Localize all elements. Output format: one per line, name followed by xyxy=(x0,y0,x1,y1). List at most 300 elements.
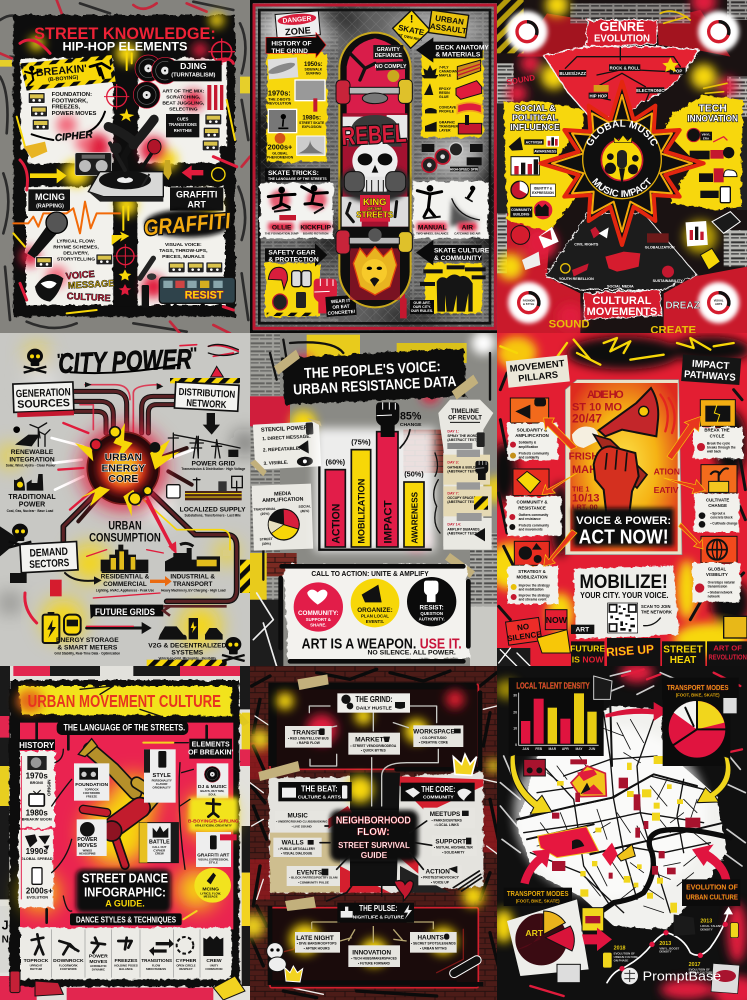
strip: dance styles: FOOTWORK xyxy=(60,967,78,971)
sign: skate at own risk: AT OWN RISK xyxy=(398,33,423,42)
column: elements of breakin xyxy=(188,739,239,903)
chart: local talent density: LOCAL TALENT DENSITY xyxy=(516,681,590,691)
panel: timeline of revolt: OF REVOLT xyxy=(448,416,482,422)
poster: megaphone and fist xyxy=(565,380,682,555)
card: support: SUPPORT xyxy=(435,838,466,845)
pathway: break the cycle: CYCLE xyxy=(710,433,724,438)
block: localized supply xyxy=(167,476,246,517)
badge: resist: RESIST: xyxy=(420,604,444,611)
chart: evolution of urban culture timeline: VINYL, BOOST xyxy=(659,946,680,950)
sub-panel: graffiti art: GRAFFITI xyxy=(176,189,217,199)
pillar: solidarity: SOLIDARITY & xyxy=(517,427,547,432)
chart: evolution of urban culture timeline: EVOLUTION OF xyxy=(686,882,738,891)
panel: deck anatomy xyxy=(416,37,489,137)
strip: dance styles: CYPHER xyxy=(176,958,197,964)
card: music: • UNDERGROUND CLUBS/BUSKING xyxy=(276,820,328,824)
panel: skate tricks: TWO-WHEEL BALANCE xyxy=(416,232,449,236)
card: market: • QUICK BYTES xyxy=(361,749,387,753)
panel: safety gear: WEAR IT xyxy=(331,298,351,304)
heading: urban consumption: URBAN xyxy=(108,519,142,533)
block: energy storage: & SMART METERS xyxy=(57,644,118,651)
pillar: strategy: MOBILIZATION xyxy=(517,575,547,580)
strip: dance styles: RHYTHM xyxy=(30,967,43,971)
sub-panel: graffiti art: ART xyxy=(187,199,206,209)
card: support xyxy=(432,835,477,856)
block: energy storage: ENERGY STORAGE xyxy=(56,637,119,644)
block: power grid: POWER GRID xyxy=(192,460,235,467)
chart: evolution of urban culture timeline xyxy=(603,879,740,994)
pathway: global visibility: GLOBAL xyxy=(708,566,726,571)
card: power moves: HEADSPINS xyxy=(79,852,96,856)
poster: megaphone and fist: FRISH xyxy=(569,452,599,463)
poster: megaphone and fist: ADIE HO xyxy=(587,389,624,401)
panel: skate culture: & COMMUNITY xyxy=(434,255,482,262)
column: elements of breakin: ATHLETICISM, CREATIVITY xyxy=(195,823,232,827)
illustration: central starburst xyxy=(538,80,706,247)
card: battle: CALL OUT xyxy=(152,845,167,849)
pathway: cultivate change: concrete block xyxy=(710,516,733,520)
sub-panel: mcing: STORYTELLING xyxy=(57,257,95,263)
icon: urban energy core xyxy=(75,423,180,516)
panel: neighborhood flow xyxy=(242,666,500,1000)
panel: mobilize xyxy=(574,566,679,639)
panel: skate tricks: BOARD ROTATION xyxy=(303,232,328,236)
block: traditional power: POWER xyxy=(19,501,45,508)
title: STREET KNOWLEDGE: xyxy=(34,24,216,43)
pillar: strategy: and mobilization xyxy=(519,587,544,591)
label: distribution network: NETWORK xyxy=(186,398,227,411)
label: distribution network xyxy=(174,382,239,412)
sign: danger zone xyxy=(275,11,320,38)
pillar: strategy: STRATEGY & xyxy=(518,569,546,574)
badge: resist xyxy=(407,577,456,626)
panel: history of the grind: THE GRIND xyxy=(271,48,308,55)
chart: visual arts donut: VISUAL xyxy=(714,299,724,303)
card: action: ACTION xyxy=(426,868,450,875)
panel: skate tricks: CATCHING BIG AIR xyxy=(454,232,480,236)
illustration: skateboard deck xyxy=(336,32,412,308)
panel: urban movement culture: JR xyxy=(2,918,18,932)
strip: dance styles: MOVES xyxy=(89,959,108,965)
panel: skate infographic xyxy=(247,0,507,334)
sub-panel: djing: DJING xyxy=(180,61,207,71)
card: walls: • PUBLIC ART/GALLERY xyxy=(278,847,316,851)
panel: skate tricks xyxy=(260,168,488,238)
panel: deck anatomy: GLUE xyxy=(439,95,449,99)
block: renewable integration: Solar, Wind, Hydro · Clean Power xyxy=(6,463,56,467)
panel: skate tricks: KICKFLIP xyxy=(300,224,332,231)
truck and wheels xyxy=(336,79,412,104)
pillar: solidarity: Protects community xyxy=(519,451,549,455)
label: impact pathways xyxy=(681,354,741,385)
pillar: community xyxy=(506,469,561,536)
watermark: promptbase: PromptBase xyxy=(643,969,721,984)
strip: dance styles: FLOORWORK xyxy=(59,963,79,967)
card: workspace: WORKSPACE xyxy=(413,729,455,736)
panel: cultural movements: CULTURAL xyxy=(593,295,652,307)
block: industrial and transport xyxy=(161,543,226,592)
pillar: solidarity: and solidarity xyxy=(519,456,539,460)
panel: voice and power: STREET xyxy=(663,644,703,655)
card: events: EVENTS xyxy=(297,869,322,876)
panel: timeline of revolt: DAY 14: xyxy=(447,523,461,527)
panel: deck anatomy: DECK ANATOMY xyxy=(435,44,489,51)
panel: timeline of revolt: (ABSTRACT TEXT) xyxy=(447,500,477,504)
chart: evolution of urban culture timeline: 2017 xyxy=(689,962,701,968)
sub-panel: djing: SCRATCHING, xyxy=(166,95,201,101)
card: foundation: FOOTWORK xyxy=(83,791,101,795)
panel: mobilize: MOBILIZE! xyxy=(579,572,668,593)
strip: dance styles: POWER xyxy=(89,954,108,960)
icon: bearings: HIGH-SPEED SPIN xyxy=(450,167,479,171)
panel: tech innovation: INNOVATION xyxy=(687,114,738,124)
sub-panel: mcing xyxy=(13,189,120,303)
panel: social and political influence: POLITICAL xyxy=(512,112,559,122)
heading: neighborhood flow: STREET SURVIVAL xyxy=(338,840,410,850)
sub-panel: graffiti art: RESIST xyxy=(185,289,224,301)
chart: local talent density: 10 xyxy=(513,727,517,731)
panel: mobilize: YOUR CITY. YOUR VOICE. xyxy=(580,590,668,600)
card: power moves: MOVES xyxy=(78,843,97,849)
card: transit: TRANSIT xyxy=(292,729,321,736)
chart: evolution of urban culture timeline: ON PHASE xyxy=(614,959,629,963)
block: industrial and transport: TRANSPORT xyxy=(173,581,212,588)
panel: genre evolution: GENRE xyxy=(599,20,645,34)
sub-panel: mcing: (RAPPING) xyxy=(36,203,64,209)
panel: cultural movements xyxy=(545,213,697,319)
badge: community: COMMUNITY: xyxy=(298,610,339,617)
arrow: red left xyxy=(182,165,203,180)
block: residential and commercial xyxy=(96,545,154,592)
panel: timeline of revolt: OCCUPY SPACE. xyxy=(447,496,475,500)
panel: global music impact xyxy=(497,0,747,333)
panel: mobilize: THE NETWORK xyxy=(641,610,672,615)
chart: media amplification pie: (30%) xyxy=(262,542,271,546)
panel: timeline of revolt: (ABSTRACT TEXT) xyxy=(447,531,477,535)
chart: transport modes lower pie: ART xyxy=(525,928,544,938)
card: foundation xyxy=(74,763,109,801)
chart: media amplification pie: TRADITIONAL xyxy=(253,507,276,512)
chart: evolution of urban culture timeline: DENSITY xyxy=(659,950,672,954)
panel: call to action xyxy=(281,565,470,661)
illustration: skateboard deck: NO COMPLY xyxy=(375,64,407,70)
sub-panel: djing: BEAT JUGGLING, xyxy=(162,101,205,107)
label: movement pillars xyxy=(506,355,570,388)
card: foundation: FOUNDATION xyxy=(75,782,108,788)
panel: timeline of revolt xyxy=(438,400,493,550)
sub-panel: graffiti art: GRAFFITI xyxy=(143,208,232,240)
sub-panel: breakin: FREEZES, xyxy=(52,105,81,111)
label: generation sources: SOURCES xyxy=(17,397,70,411)
card: battle xyxy=(139,823,179,863)
card: action xyxy=(418,865,462,885)
block: renewable integration: INTEGRATION xyxy=(9,456,55,463)
panel: timeline of revolt: SPRAY THE WORD. xyxy=(447,434,478,438)
callout: 85 percent change xyxy=(376,402,422,448)
pillar: strategy: Improve the strategy xyxy=(519,593,550,597)
heading: neighborhood flow: NEIGHBORHOOD xyxy=(336,816,411,827)
panel: social and political influence: INFLUENCE xyxy=(510,122,560,132)
column: history timeline: 1980s xyxy=(26,808,48,817)
pathway: break the cycle: Break the cycle xyxy=(707,441,730,445)
card: late night: • DIVE BARS/ROOFTOPS xyxy=(297,942,337,946)
panel: skate tricks: MANUAL xyxy=(418,224,447,231)
panel: global music impact: DREAZ xyxy=(665,300,700,311)
watermark: promptbase xyxy=(621,968,721,984)
block: v2g xyxy=(148,618,227,661)
chart: media amplification pie: (25%) xyxy=(260,512,269,516)
sub-panel: breakin: POWER MOVES xyxy=(52,111,96,117)
column: history timeline xyxy=(18,739,55,908)
panel: cultural movements: SOCIAL MEDIA xyxy=(607,284,634,288)
panel: genre evolution xyxy=(544,20,699,122)
panel: skate tricks: THE LANGUAGE OF THE STREETS xyxy=(268,177,327,181)
slogan: ART IS A WEAPON. USE IT. xyxy=(302,636,462,652)
chart: local talent density xyxy=(509,678,604,756)
panel: timeline of revolt: DAY 7: xyxy=(447,491,459,495)
bar: mobilization: (75%) xyxy=(351,437,371,446)
chart: evolution of urban culture timeline: URBAN CULTURE xyxy=(614,955,638,959)
sign: skate at own risk: ! xyxy=(410,14,413,26)
chart: transport modes top pie xyxy=(662,678,739,766)
column: elements of breakin: ELEMENTS xyxy=(192,742,230,749)
panel: timeline of revolt: (ABSTRACT TEXT) xyxy=(447,438,477,442)
card: transit: • RED LINE/YELLOW BUS xyxy=(288,736,329,740)
sub-panel: mcing: LYRICAL FLOW: xyxy=(57,239,96,245)
text: king of the streets: OF THE xyxy=(367,206,382,211)
pillar: strategy: Improve the strategy xyxy=(519,583,550,587)
illustration: central starburst: GLOBAL MUSIC xyxy=(586,120,658,146)
card: style: ORIGINALITY xyxy=(153,785,171,789)
strip: dance styles xyxy=(20,928,232,979)
panel: global music impact: SOUND xyxy=(506,73,536,87)
chart: evolution of urban culture timeline: EVOLUTION OF xyxy=(689,967,710,971)
pathway: cultivate change: • Sprout a xyxy=(710,512,725,516)
panel: urban movement culture: NCE xyxy=(2,935,23,946)
column: elements of breakin: VISUAL EXPRESSION, xyxy=(198,857,229,861)
pathway: global visibility: • Global network xyxy=(708,591,733,595)
heading: neighborhood flow xyxy=(330,810,418,862)
chart: transport modes top pie: (FOOT, BIKE, SKATE) xyxy=(676,693,720,698)
panel: stencil power xyxy=(253,421,321,470)
pathway: break the cycle: breaks through the xyxy=(707,445,736,449)
icon: bearings xyxy=(422,143,483,172)
card: foundation: FREEZE xyxy=(86,794,97,798)
callout: 85 percent change: CHANGE xyxy=(400,422,422,428)
panel: safety gear xyxy=(265,243,357,317)
bar: mobilization xyxy=(351,437,371,547)
sub-panel: mcing: VOICE xyxy=(65,269,95,281)
card: events xyxy=(287,866,340,886)
card: music: • LIVE SOUND xyxy=(292,824,313,828)
heading: urban consumption xyxy=(89,519,161,544)
block: residential and commercial: Lighting, HVAC, Appliances · Peak Use xyxy=(96,588,154,592)
sub-panel: mcing: RHYME SCHEMES, xyxy=(53,245,99,251)
sub-panel: breakin: BREAKIN' xyxy=(35,63,87,79)
sub-panel: breakin: CIPHER xyxy=(54,129,94,144)
panel: urban movement culture: ORIGIN xyxy=(47,779,52,796)
panel: tech innovation: ERA xyxy=(703,136,710,140)
icon: lion xyxy=(353,247,397,295)
strip: dance styles: OPEN CIRCLE xyxy=(176,963,196,967)
card: workspace xyxy=(413,725,463,747)
column: history timeline: HISTORY xyxy=(19,741,55,750)
title xyxy=(282,348,467,405)
sub-panel: djing: (TURNTABLISM) xyxy=(171,73,216,79)
panel: deck anatomy: CONCAVE xyxy=(439,105,457,109)
panel: voice and power: HEAT xyxy=(670,655,696,666)
sub-panel: graffiti art xyxy=(140,187,235,308)
strip: dance styles: BALANCE xyxy=(119,967,133,971)
pillar: solidarity xyxy=(508,398,558,460)
title xyxy=(34,28,214,50)
sub-panel: mcing: DELIVERY, xyxy=(63,251,89,257)
panel: genre evolution: BLUES/JAZZ xyxy=(559,71,586,76)
card: meetups: • PARKS/CENTERS xyxy=(432,818,463,822)
pillar: community: Gathers community xyxy=(519,513,549,517)
panel: cultural movements: SUSTAINABILITY xyxy=(653,279,683,283)
card: haunts xyxy=(410,932,457,953)
chart: transport modes lower pie: TRANSPORT MODES xyxy=(507,891,569,898)
label: future grids: FUTURE GRIDS xyxy=(95,607,155,617)
pillar: solidarity: Solidarity & xyxy=(519,441,537,445)
sub-panel: breakin: FOOTWORK, xyxy=(52,98,88,104)
pillar: community: and resistance xyxy=(519,517,541,521)
label: demand sectors: SECTORS xyxy=(29,557,70,571)
chart: visual arts donut: ARTS xyxy=(715,302,723,306)
panel: timeline of revolt: GATHER & BUILD. xyxy=(447,465,477,469)
card: action: • VOICE UP xyxy=(431,880,450,884)
bar: action xyxy=(325,457,346,547)
pipes xyxy=(63,385,237,601)
block: localized supply: LOCALIZED SUPPLY xyxy=(180,506,246,513)
chart: transport modes top pie: TRANSPORT MODES xyxy=(667,685,729,692)
card: market: • STREET VENDOR/BODEGA xyxy=(350,744,397,748)
panel: skate culture: OUR ART. xyxy=(413,301,431,305)
card: power moves: POWER xyxy=(77,837,98,843)
panel: voice and power: ART OF xyxy=(713,643,742,652)
pillar: community: and movements xyxy=(519,527,543,531)
card: meetups xyxy=(423,808,475,828)
pathway: global visibility xyxy=(692,536,740,602)
strip: dance styles: RESPECT xyxy=(179,967,193,971)
label: future grids xyxy=(90,605,163,619)
chart: music donut top left xyxy=(506,11,548,52)
chart: local talent density: MAY xyxy=(575,747,583,751)
illustration: skateboard deck: GRAVITY xyxy=(377,47,400,53)
title: THE PEOPLE'S VOICE: xyxy=(304,359,441,382)
column: history timeline: 1970s xyxy=(26,772,48,781)
panel: safety gear: SAFETY GEAR xyxy=(268,250,316,257)
illustration: b-boy freeze xyxy=(78,739,157,865)
icon: skull and crown xyxy=(267,943,303,982)
chart: transport modes lower pie xyxy=(504,888,589,976)
sign: urban assault xyxy=(429,10,469,38)
block: v2g: SYSTEMS xyxy=(171,650,204,657)
panel: timeline of revolt: DAY 3: xyxy=(447,461,459,465)
panel: safety gear: OR EAT xyxy=(332,304,350,310)
card: meetups: MEETUPS xyxy=(430,811,460,818)
strip: dance styles: UPRIGHT xyxy=(30,963,43,967)
label: the beat xyxy=(278,782,352,801)
label: the core: THE CORE: xyxy=(421,785,455,794)
panel: urban movement culture xyxy=(0,666,250,1000)
panel: skate culture: OUR RULES. xyxy=(411,309,433,313)
chart: music donut top right xyxy=(698,11,739,52)
map xyxy=(514,706,730,929)
label: dance styles heading xyxy=(70,913,182,925)
label: movement pillars: PILLARS xyxy=(518,370,559,384)
card: support: • SOLIDARITY xyxy=(442,850,465,854)
panel: genre evolution: HIP HOP xyxy=(589,93,607,98)
panel: deck anatomy: MAPLE xyxy=(439,74,452,78)
panel: history of the grind: 1970s: xyxy=(268,89,291,98)
poster: megaphone and fist: EATIV xyxy=(654,485,679,495)
heading: neighborhood flow: GUIDE xyxy=(361,850,388,860)
panel: deck anatomy: & MATERIALS xyxy=(435,52,481,59)
sub-panel: djing: RHYTHM xyxy=(174,128,192,133)
strip: dance styles: FORMATION xyxy=(206,967,222,971)
chart: visual arts donut xyxy=(698,282,739,323)
icon: urban energy core: URBAN xyxy=(105,453,142,464)
strip: dance styles: TRANSITIONS xyxy=(141,958,173,964)
card: music xyxy=(275,811,328,830)
card: power moves xyxy=(77,819,107,856)
panel: social and political influence xyxy=(504,102,584,232)
panel: global music impact: SOUND xyxy=(549,318,590,330)
card: market: MARKET xyxy=(355,736,384,743)
sub-panel: breakin xyxy=(20,55,116,158)
panel: history of the grind: 2000s+ xyxy=(268,143,292,152)
block: v2g: Vehicle-to-Grid, Microgrids · Flexibility xyxy=(158,657,216,661)
text: rebel: REBEL xyxy=(341,120,407,151)
chart: resistance bar chart xyxy=(315,428,435,551)
strip: dance styles: FREEZES xyxy=(114,958,138,964)
chart: evolution of urban culture timeline: 2013 xyxy=(700,919,712,925)
card: haunts: • URBAN MYTHS xyxy=(420,946,447,950)
card: innovation: • TECH HUBS/MAKERSPACES xyxy=(351,957,397,961)
column: history timeline: GLOBAL SPREAD xyxy=(21,857,53,861)
panel: voice and power: ART xyxy=(575,627,589,634)
pathway: global visibility: Oversteps natural xyxy=(708,581,735,585)
panel: genre evolution: EVOLUTION xyxy=(594,34,650,45)
title: HIP-HOP ELEMENTS xyxy=(62,39,187,53)
qr code xyxy=(608,603,638,633)
pillar: strategy: and streams event xyxy=(519,597,547,601)
chart: fashion and style donut: & STYLE xyxy=(523,302,535,306)
heading: urban consumption: CONSUMPTION xyxy=(89,530,161,544)
sub-panel: mcing: MESSAGE xyxy=(68,278,115,291)
panel: voice and power: RISE UP xyxy=(606,642,654,659)
strip: dance styles: DOWNROCK xyxy=(53,958,84,964)
badge: community: SUPPORT & xyxy=(306,617,331,622)
badge: community xyxy=(294,582,343,632)
sign: danger zone: ZONE xyxy=(285,25,311,37)
column: elements of breakin: DJ & MUSIC xyxy=(198,784,227,790)
pillar: community: RESISTANCE xyxy=(518,505,546,510)
sub-panel: djing: CUES xyxy=(177,117,189,122)
title: CITY POWER xyxy=(58,343,193,379)
card: meetups: • LOCAL LINKS xyxy=(434,823,460,827)
panel: cultural movements: YOUTH REBELLION xyxy=(559,277,594,281)
sticker: no silence: SILENCE xyxy=(507,629,543,643)
title xyxy=(58,347,196,374)
panel: stencil power: 3. VISIBLE. xyxy=(263,460,288,466)
strip: dance styles: SMOOTHNESS xyxy=(146,967,166,971)
pillar: solidarity: amplification xyxy=(519,445,538,449)
panel: stencil power: 2. REPEATABLE. xyxy=(263,446,300,453)
panel: history of the grind: PHENOMENON xyxy=(267,155,294,159)
